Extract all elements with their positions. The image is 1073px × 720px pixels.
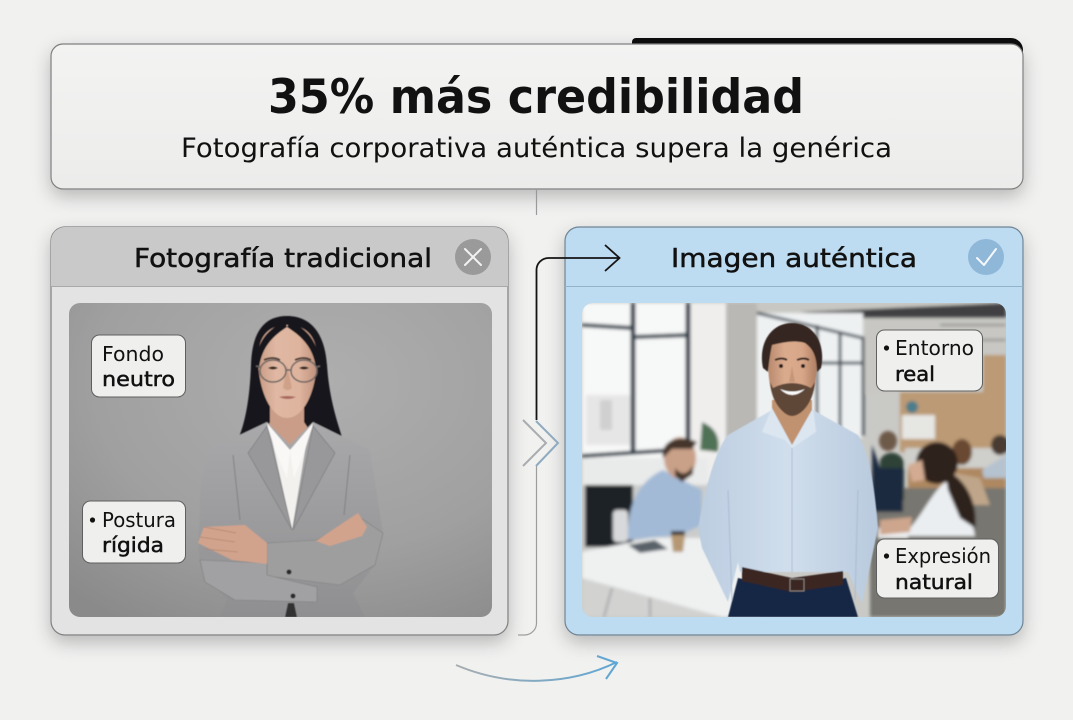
photo: man in office: [582, 303, 1009, 617]
plant: [700, 422, 719, 452]
heading: traditional: Fotografía tradicional: [134, 244, 432, 274]
crossed arms: [267, 516, 383, 585]
connector line from header: [536, 189, 538, 215]
panel: authentic image: [565, 227, 1023, 635]
hair back: [239, 316, 342, 440]
wood wall: [900, 392, 1006, 452]
tablet and cup: [628, 540, 668, 553]
radiator: [585, 485, 633, 547]
lapels: [248, 426, 335, 530]
title: 35% más credibilidad: [268, 70, 804, 125]
callout: fondo neutro: [92, 335, 186, 397]
trousers: [728, 578, 858, 617]
header card: [51, 44, 1023, 189]
arrow: grey elbow line: [518, 466, 536, 635]
jacket: [238, 421, 342, 616]
panel: traditional photography: [51, 227, 508, 635]
face: [258, 325, 317, 418]
arrow: black elbow arrow: [536, 245, 620, 420]
callout: entorno real: [876, 330, 982, 391]
callout: expresión natural: [876, 539, 998, 598]
callout: postura rígida: [82, 501, 186, 563]
photo: woman in grey suit: [69, 303, 492, 617]
right window: [757, 313, 863, 438]
background people: [879, 431, 897, 451]
subtitle: Fotografía corporativa auténtica supera la genérica: [181, 133, 892, 164]
callout: expresión natural: Expresión: [895, 544, 991, 568]
main table: [582, 538, 760, 617]
background table: [908, 468, 1006, 488]
seated woman: [905, 482, 975, 536]
arrow: curved bottom arrow: [456, 656, 617, 681]
header tab: black bar: [632, 38, 1023, 60]
icon: check: [968, 239, 1004, 275]
callout: fondo neutro: Fondo: [102, 342, 164, 366]
neck: [268, 406, 308, 445]
belt: [742, 567, 843, 592]
callout: expresión natural: natural: [895, 570, 973, 594]
callout: fondo neutro: neutro: [102, 367, 175, 391]
shirt: [267, 425, 313, 530]
man neck and shirt: [772, 400, 812, 450]
face: [768, 340, 818, 400]
callout: postura rígida: Postura: [102, 508, 176, 532]
icon: double chevron: [523, 420, 558, 466]
callout: entorno real: Entorno: [895, 336, 974, 360]
wall columns: [690, 303, 726, 483]
heading: authentic: Imagen auténtica: [671, 244, 917, 274]
ceiling and upper wall: [760, 303, 1006, 394]
left window: [582, 303, 690, 458]
callout: entorno real: real: [895, 362, 935, 386]
callout: postura rígida: rígida: [102, 533, 164, 557]
seated man: [613, 510, 628, 542]
icon: cross: [455, 239, 491, 275]
glasses: [256, 360, 320, 382]
